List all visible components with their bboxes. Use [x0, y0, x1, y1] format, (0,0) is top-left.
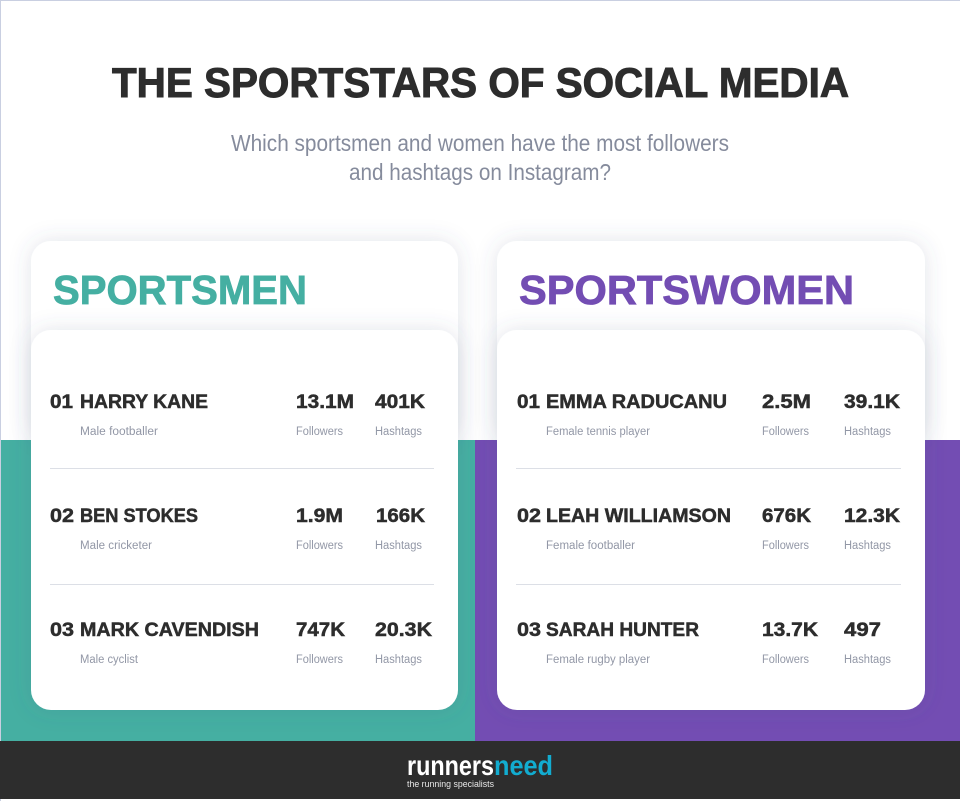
- row: Leah Williamson: 676K: [762, 505, 811, 527]
- row: Harry Kane: 01: [50, 391, 73, 413]
- row: Harry Kane: [50, 391, 425, 438]
- row: Harry Kane: Male footballer: [80, 426, 158, 438]
- row: Sarah Hunter: SARAH HUNTER: [546, 619, 699, 641]
- heading: sportswomen: SPORTSWOMEN: [519, 267, 854, 313]
- row: Sarah Hunter: 13.7K: [762, 619, 818, 641]
- panel: sportsmen: [31, 241, 458, 710]
- row: Sarah Hunter: 03: [517, 619, 541, 641]
- row: Leah Williamson: Female footballer: [546, 540, 635, 552]
- row: Mark Cavendish: 03: [50, 619, 74, 641]
- row: Sarah Hunter: 497: [844, 619, 881, 641]
- row: Mark Cavendish: 747K: [296, 619, 345, 641]
- subtitle: [231, 130, 729, 185]
- row: Sarah Hunter: Followers: [762, 654, 809, 666]
- row: Emma Raducanu: [517, 391, 900, 438]
- row: Sarah Hunter: [517, 619, 891, 666]
- row: Harry Kane: 13.1M: [296, 391, 354, 413]
- row: Emma Raducanu: Hashtags: [844, 426, 891, 438]
- row: Leah Williamson: 12.3K: [844, 505, 900, 527]
- row: Ben Stokes: 02: [50, 505, 74, 527]
- row: Emma Raducanu: 01: [517, 391, 540, 413]
- row: Ben Stokes: 166K: [376, 505, 425, 527]
- subtitle: and hashtags on Instagram?: [349, 159, 611, 185]
- row: Leah Williamson: 02: [517, 505, 541, 527]
- row: Emma Raducanu: EMMA RADUCANU: [546, 391, 727, 413]
- row: Ben Stokes: 1.9M: [296, 505, 343, 527]
- row: Harry Kane: Hashtags: [375, 426, 422, 438]
- row: Emma Raducanu: 2.5M: [762, 391, 811, 413]
- row: Emma Raducanu: Followers: [762, 426, 809, 438]
- row: Leah Williamson: Followers: [762, 540, 809, 552]
- row: Ben Stokes: Male cricketer: [80, 540, 152, 552]
- title: THE SPORTSTARS OF SOCIAL MEDIA: [112, 59, 849, 106]
- sportsmen header card: [31, 241, 458, 441]
- background: teal block: [0, 440, 475, 741]
- row: Mark Cavendish: Followers: [296, 654, 343, 666]
- row: Harry Kane: Followers: [296, 426, 343, 438]
- row: Sarah Hunter: Hashtags: [844, 654, 891, 666]
- footer bar: [0, 741, 960, 799]
- logo: runnersneed: [407, 750, 553, 790]
- row: Emma Raducanu: Female tennis player: [546, 426, 650, 438]
- sportswomen table card: [497, 330, 925, 710]
- row: Ben Stokes: [50, 505, 425, 552]
- logo: runnersneed: runners: [407, 750, 494, 781]
- panel: sportswomen: [497, 241, 925, 710]
- heading: sportsmen: SPORTSMEN: [53, 267, 307, 313]
- row: Harry Kane: 401K: [375, 391, 425, 413]
- logo: runnersneed: need: [494, 750, 553, 781]
- sportsmen table card: [31, 330, 458, 710]
- row: Ben Stokes: Followers: [296, 540, 343, 552]
- row: Leah Williamson: LEAH WILLIAMSON: [546, 505, 731, 527]
- sportswomen header card: [497, 241, 925, 441]
- row: Harry Kane: HARRY KANE: [80, 391, 208, 413]
- row: Ben Stokes: Hashtags: [375, 540, 422, 552]
- row: Mark Cavendish: [50, 619, 432, 666]
- row: Mark Cavendish: MARK CAVENDISH: [80, 619, 259, 641]
- row: Sarah Hunter: Female rugby player: [546, 654, 650, 666]
- row: Mark Cavendish: 20.3K: [375, 619, 432, 641]
- row: Mark Cavendish: Hashtags: [375, 654, 422, 666]
- row: Leah Williamson: [517, 505, 900, 552]
- subtitle: Which sportsmen and women have the most followers: [231, 130, 729, 156]
- row: Ben Stokes: BEN STOKES: [80, 505, 198, 527]
- logo: runnersneed: the running specialists: [407, 779, 494, 790]
- row: Leah Williamson: Hashtags: [844, 540, 891, 552]
- row: Emma Raducanu: 39.1K: [844, 391, 900, 413]
- background: purple block: [475, 440, 960, 741]
- row: Mark Cavendish: Male cyclist: [80, 654, 139, 666]
